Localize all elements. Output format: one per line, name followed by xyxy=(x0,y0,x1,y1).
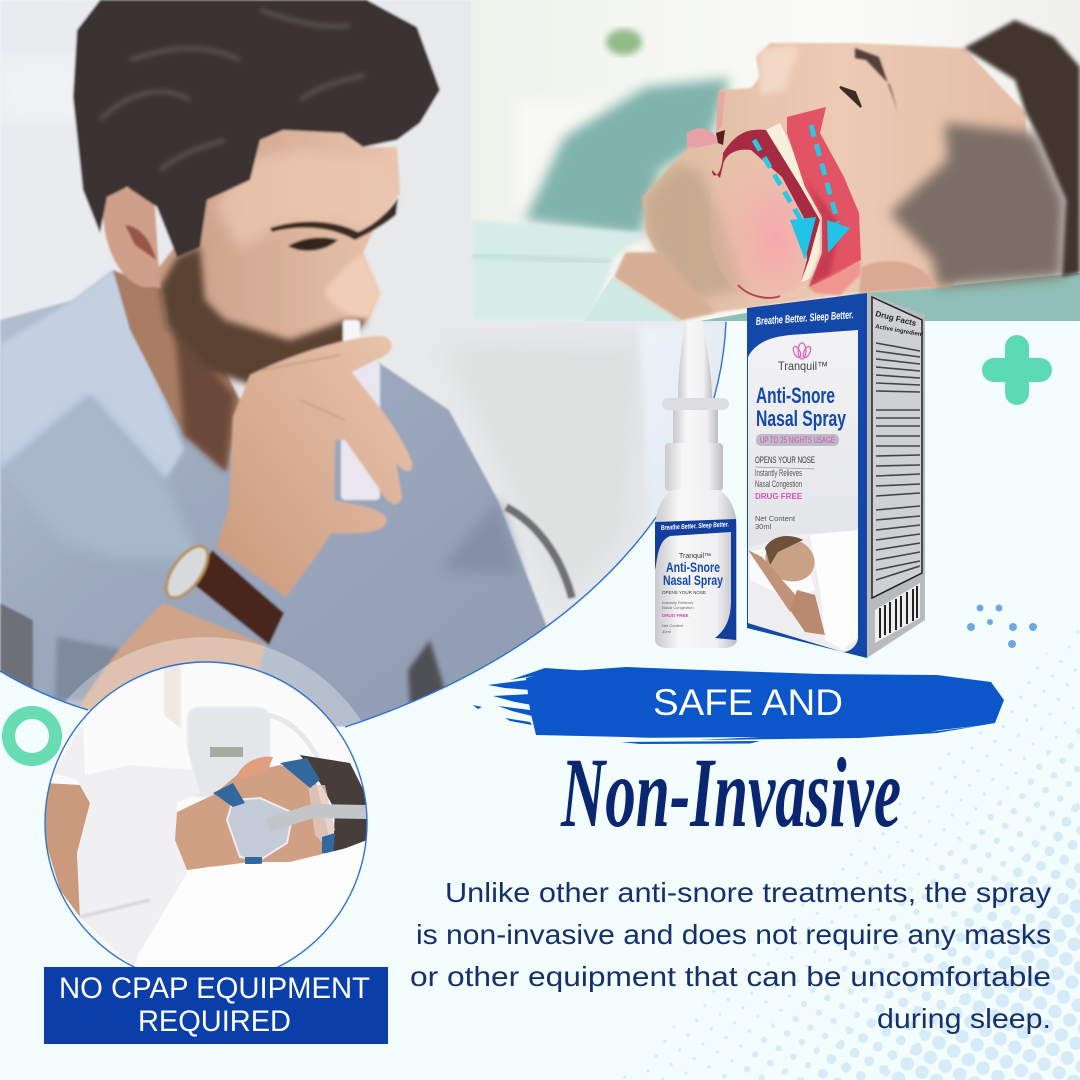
heading banner: brush stroke: SAFE AND xyxy=(653,682,843,723)
product: box: Instantly Relieves xyxy=(755,468,802,478)
mask xyxy=(227,798,293,860)
forearm xyxy=(78,603,265,715)
background halftone dots xyxy=(620,620,1080,1080)
product: bottle: Net Content xyxy=(662,623,684,628)
photo: sleeping man with airway diagram xyxy=(471,0,1080,321)
ear xyxy=(103,188,160,287)
eyebrow and eye xyxy=(855,48,898,113)
body text: is non-invasive and does not require any masks xyxy=(416,919,1051,950)
head xyxy=(615,43,1026,320)
photo: man using nasal spray xyxy=(0,0,726,727)
head xyxy=(175,765,333,870)
product: box: OPENS YOUR NOSE xyxy=(755,455,815,466)
product: box: Net Content xyxy=(755,514,796,523)
icon: plus xyxy=(982,335,1052,405)
product: box: Active ingredient xyxy=(875,324,924,338)
watch xyxy=(158,539,284,645)
hose xyxy=(268,811,368,825)
mask straps xyxy=(213,758,335,864)
airway diagram xyxy=(709,107,861,298)
body text: or other equipment that can be uncomfortable xyxy=(410,961,1051,992)
inset photo: man with CPAP mask xyxy=(46,662,366,967)
label box: no CPAP: REQUIRED xyxy=(138,1005,291,1038)
product: bottle: Anti-Snore xyxy=(666,559,720,575)
ear xyxy=(237,757,273,778)
icon: lotus logo xyxy=(792,343,812,359)
sheets xyxy=(471,220,646,321)
nose xyxy=(325,253,380,317)
ear xyxy=(859,261,937,293)
icon: decorative dots xyxy=(967,604,1037,648)
product: bottle xyxy=(655,321,737,648)
icon: green ring xyxy=(8,712,56,760)
product: box: UP TO 25 NIGHTS USAGE xyxy=(760,435,835,445)
box photo: sleeping man xyxy=(748,530,858,652)
neck xyxy=(113,270,240,472)
product: bottle: Breathe Better. Sleep Better. xyxy=(661,521,729,532)
hand xyxy=(216,336,412,597)
bottle label xyxy=(655,519,736,640)
box side panel xyxy=(867,293,925,658)
product: bottle: Nasal Congestion xyxy=(662,605,694,610)
product: box: DRUG FREE xyxy=(755,492,803,501)
translucent ring around inset xyxy=(66,637,362,727)
hair xyxy=(73,0,440,257)
shirt xyxy=(53,710,200,967)
product: bottle: Nasal Spray xyxy=(663,572,723,588)
pillow teal xyxy=(525,78,730,236)
airflow arrows xyxy=(754,125,850,260)
pillow xyxy=(137,848,346,960)
hair fade xyxy=(890,123,1065,287)
product: bottle: Tranquil™ xyxy=(679,553,711,560)
body text: during sleep. xyxy=(877,1003,1051,1034)
barcode xyxy=(875,583,920,643)
product: box: Nasal Congestion xyxy=(755,479,802,489)
product: bottle: Instantly Relieves xyxy=(662,600,693,605)
arm xyxy=(42,783,90,917)
right pillow xyxy=(700,273,1080,321)
heading banner: brush stroke xyxy=(473,667,1004,744)
product: bottle: DRUG FREE xyxy=(662,613,689,618)
product: box: Anti-Snore xyxy=(756,383,835,408)
spray bottle xyxy=(341,320,380,500)
product: box: Breathe Better. Sleep Better. xyxy=(755,309,854,328)
eyebrow and eye xyxy=(270,198,398,240)
curved blue edge of photo xyxy=(345,322,726,727)
label box: no CPAP xyxy=(44,967,388,1044)
face xyxy=(157,128,401,344)
product: box: Tranquil™ xyxy=(778,359,828,373)
hair xyxy=(964,20,1080,277)
shirt xyxy=(0,270,547,727)
lips xyxy=(687,128,720,148)
mask forehead rest xyxy=(308,785,335,845)
product: box: 30ml xyxy=(755,522,772,531)
product: bottle: OPENS YOUR NOSE xyxy=(662,590,706,595)
product: bottle: 30ml xyxy=(662,629,671,634)
label box: no CPAP: NO CPAP EQUIPMENT xyxy=(59,972,370,1005)
box white panel xyxy=(748,330,858,652)
body text: Unlike other anti-snore treatments, the spray xyxy=(445,877,1051,908)
body text xyxy=(410,877,1051,1034)
product: box: Nasal Spray xyxy=(756,406,847,431)
beard xyxy=(160,247,368,387)
box blue front xyxy=(747,293,867,658)
product: box xyxy=(747,293,925,658)
product: box: Drug Facts xyxy=(875,309,918,328)
hair xyxy=(300,755,367,853)
